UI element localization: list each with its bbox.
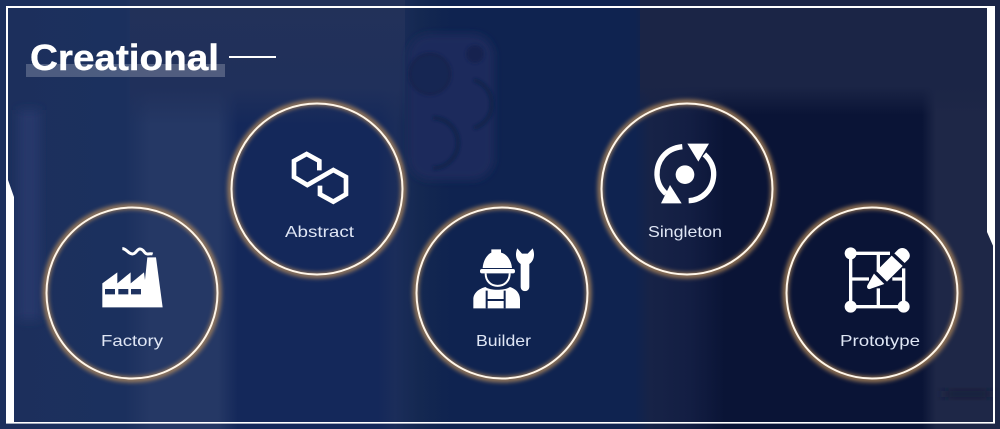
panel: Builder: Builder [476,333,532,350]
icon: phone camera module [408,34,494,180]
panel: Prototype: Prototype [840,333,920,350]
panel: Singleton: Singleton [648,224,722,241]
panel: Singleton [600,102,774,276]
panel: Factory: Factory [101,333,163,350]
panel: Builder [416,206,588,380]
icon: linked hexagons [294,154,346,202]
panel: Abstract: Abstract [285,224,355,241]
panel: Prototype [786,206,958,380]
title: Creational [30,37,219,78]
icon: rotating arrows [657,144,714,203]
icon: factory [102,249,163,307]
icon: builder with wrench [473,248,534,308]
icon: blueprint with pencil [845,247,910,313]
panel: Factory [46,206,218,380]
panel: Abstract [230,102,404,276]
